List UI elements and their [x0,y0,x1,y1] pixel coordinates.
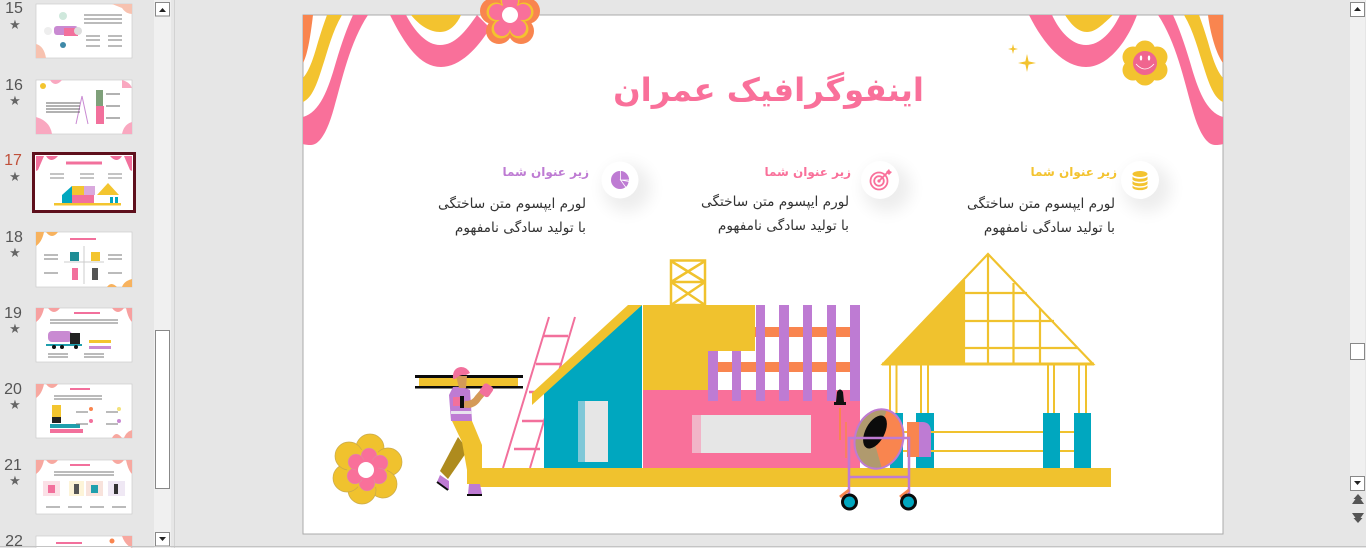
thumbnail 15 [5,0,132,58]
thumbnail 19: 19 [4,305,22,322]
thumbnail 15: ★ [9,17,21,32]
body: pink column text [701,194,849,234]
left corner wave [303,15,368,145]
panel: slide thumbnails sidebar [4,0,134,548]
thumbnail 16 [5,77,132,134]
body: yellow column text [967,196,1115,236]
building: yellow timber frame house [882,254,1094,468]
building: scaffold box on roof [671,260,705,305]
text block: pink column [701,165,851,234]
thumbnail 21 [4,457,132,514]
icon: sparkles [1008,44,1036,72]
thumbnail 18 [5,229,132,287]
thumbnail 19: ★ [9,321,21,336]
bottom status line [0,546,1366,547]
body: pink column text: لورم ایپسوم متن ساختگی [701,194,849,210]
right scrollbar [1350,0,1365,523]
title: اینفوگرافیک عمران [613,71,924,109]
thumbnail 16: ★ [9,93,21,108]
ladder [503,317,575,468]
icon: bollard lamp [834,390,846,458]
top decorative waves [303,15,1223,145]
left scrollbar [154,0,175,548]
icon: coin stack in circle [1121,161,1171,212]
text block: purple column [438,165,589,236]
icon: smiley flower [1122,40,1168,86]
icon: pie chart in circle [602,162,651,212]
heading: yellow subtitle: زیر عنوان شما [1030,165,1117,179]
thumbnail 19 [4,305,132,362]
icon: orange flower top [480,0,540,44]
thumbnail 15: 15 [5,0,23,17]
body: purple column text: لورم ایپسوم متن ساختگی [438,196,586,212]
right corner wave [1158,15,1223,145]
icon: target in circle [861,161,911,212]
thumbnail 21: 21 [4,457,22,474]
thumbnail 16: 16 [5,77,23,94]
thumbnail 22 [5,533,132,548]
thumbnail 17 selected: ★ [9,169,21,184]
body: purple column text: با تولید سادگی نامفهوم [455,220,586,236]
building: pink and yellow block with purple columns [643,305,860,468]
thumbnail 20: 20 [4,381,22,398]
heading: purple subtitle: زیر عنوان شما [502,165,589,179]
text block: yellow column [967,165,1117,236]
right middle swag [1029,15,1137,67]
left middle swag [390,15,490,67]
body: purple column text [438,196,586,236]
body: yellow column text: با تولید سادگی نامفهوم [984,220,1115,236]
worker carrying beam [415,367,523,495]
panel: slide background [303,15,1223,534]
thumbnail 17 selected: 17 [4,152,22,169]
body: yellow column text: لورم ایپسوم متن ساختگی [967,196,1115,212]
thumbnail 18: 18 [5,229,23,246]
cement mixer [840,404,931,509]
body: pink column text: با تولید سادگی نامفهوم [718,218,849,234]
thumbnail 21: ★ [9,473,21,488]
building: teal house with roof and door [532,305,642,468]
ground slab [480,468,1111,487]
thumbnail 18: ★ [9,245,21,260]
thumbnail 17 selected [4,152,134,212]
thumbnail 20 [4,381,132,438]
icon: yellow and pink flower bottom left [333,434,402,504]
thumbnail 20: ★ [9,397,21,412]
heading: pink subtitle: زیر عنوان شما [764,165,851,179]
